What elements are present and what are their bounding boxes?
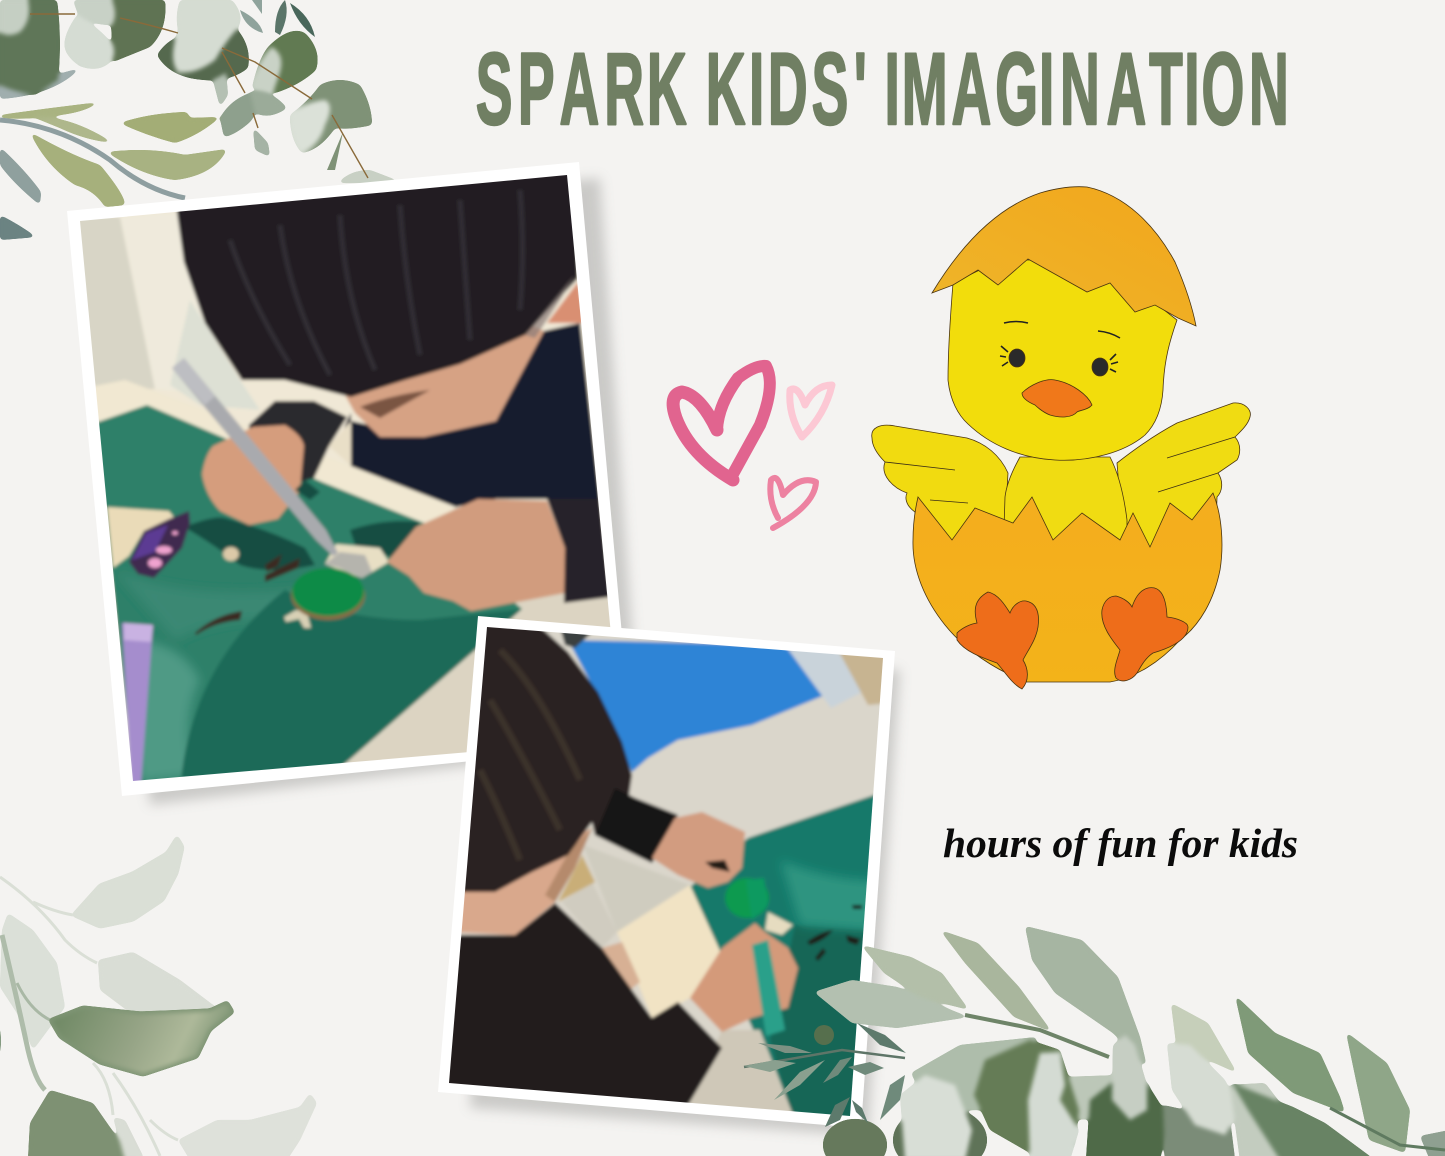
decorative hair streaks <box>230 190 522 375</box>
pink small heart <box>790 385 832 437</box>
chick right wing <box>1117 403 1250 560</box>
small rose heart <box>770 478 816 528</box>
foliage: bottom right <box>744 926 1445 1156</box>
chick beak <box>1022 380 1092 417</box>
illustration: wooden hatching chick <box>872 187 1250 689</box>
chick left foot <box>957 592 1038 689</box>
photo: child colouring with green marker <box>430 610 900 1136</box>
chick right foot <box>1102 588 1188 681</box>
decorative hair streaks <box>480 650 580 860</box>
chick lashes and brows <box>1000 322 1120 372</box>
chick head <box>948 260 1177 460</box>
foliage: bottom left <box>0 837 317 1156</box>
title: SPARK KIDS' IMAGINATION <box>476 33 1289 146</box>
photo: child colouring with silver marker <box>60 160 640 805</box>
big heart <box>673 366 770 480</box>
chick body <box>1003 457 1127 560</box>
caption: hours of fun for kids <box>943 820 1298 866</box>
chick egg bottom <box>913 493 1222 682</box>
icon: hearts <box>673 366 832 528</box>
chick left wing <box>872 425 1008 560</box>
chick shell cap <box>932 187 1196 326</box>
foliage: top left <box>0 0 396 240</box>
chick eyes <box>1009 349 1108 376</box>
